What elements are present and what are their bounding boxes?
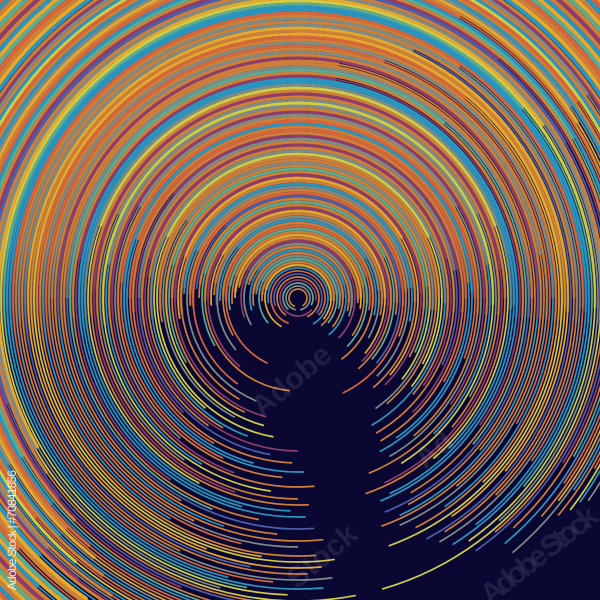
faint diagonal watermarks: Ad xyxy=(408,424,460,475)
thick upper arc bands fading toward the horizon xyxy=(0,0,597,350)
stock id watermark: Adobe Stock | #70841856 xyxy=(5,470,19,590)
faint diagonal watermarks: Adobe xyxy=(245,338,338,423)
faint diagonal watermarks: Stock xyxy=(280,517,364,595)
faint diagonal watermarks xyxy=(245,338,600,600)
